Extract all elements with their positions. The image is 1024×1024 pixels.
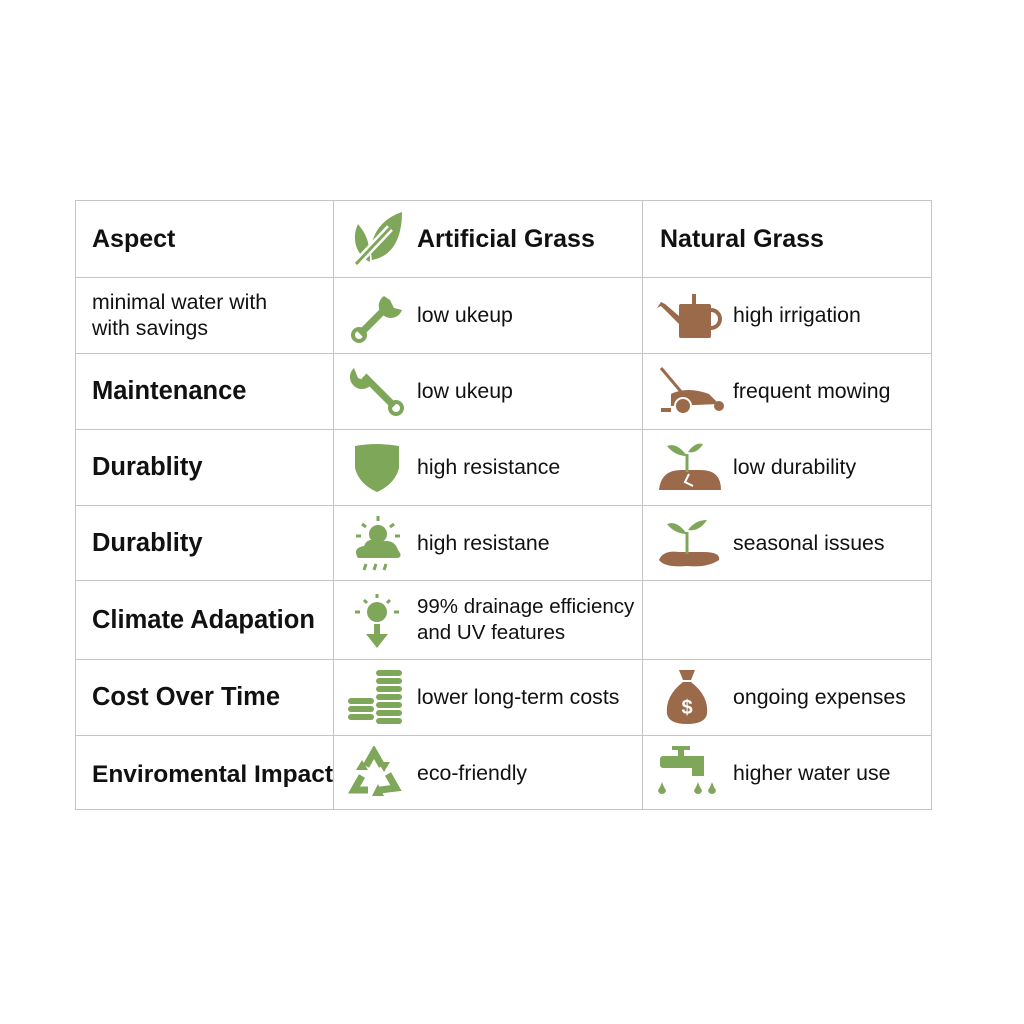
text: higher water use	[733, 761, 890, 785]
header: Natural Grass: Natural Grass	[660, 224, 824, 252]
header: Aspect: Aspect	[92, 224, 175, 252]
icon: coin stacks	[348, 670, 402, 724]
icon: recycle	[348, 746, 402, 796]
text: ongoing expenses	[733, 685, 906, 709]
table frame	[75, 200, 932, 810]
text: and UV features	[417, 621, 565, 644]
text: seasonal issues	[733, 531, 885, 555]
row 7 label: Enviromental Impact	[92, 761, 333, 788]
row 1 label	[92, 290, 267, 340]
text: low ukeup	[417, 379, 513, 403]
row 1 label: with savings	[92, 316, 208, 340]
text: high resistance	[417, 455, 560, 479]
icon: money bag	[666, 670, 708, 724]
text: lower long-term costs	[417, 685, 619, 709]
row 2 label: Maintenance	[92, 376, 246, 404]
text: 99% drainage efficiency	[417, 595, 634, 618]
icon: artificial leaf	[354, 212, 402, 265]
text: low durability	[733, 455, 856, 479]
row 4 label: Durablity	[92, 528, 203, 556]
icon: shield	[355, 444, 399, 492]
icon: faucet	[658, 746, 716, 794]
icon: sun drainage arrow	[355, 594, 399, 648]
text: high irrigation	[733, 303, 861, 327]
icon: wrench	[351, 296, 402, 343]
text: eco-friendly	[417, 761, 527, 785]
icon: wrench	[350, 368, 404, 416]
icon: watering can	[657, 294, 722, 338]
text: frequent mowing	[733, 379, 890, 403]
row 5 label: Climate Adapation	[92, 606, 315, 634]
header: Artificial Grass: Artificial Grass	[417, 224, 595, 252]
row 1 label: minimal water with	[92, 290, 267, 314]
icon: money bag: $	[681, 697, 693, 719]
icon: sun cloud rain	[356, 516, 401, 570]
icon: sprout puddle	[659, 520, 720, 566]
text: low ukeup	[417, 303, 513, 327]
icon: lawn mower	[660, 367, 724, 413]
text: high resistane	[417, 531, 550, 555]
row 6 label: Cost Over Time	[92, 682, 280, 710]
icon: sprout in soil	[659, 444, 721, 490]
row 3 label: Durablity	[92, 452, 203, 480]
